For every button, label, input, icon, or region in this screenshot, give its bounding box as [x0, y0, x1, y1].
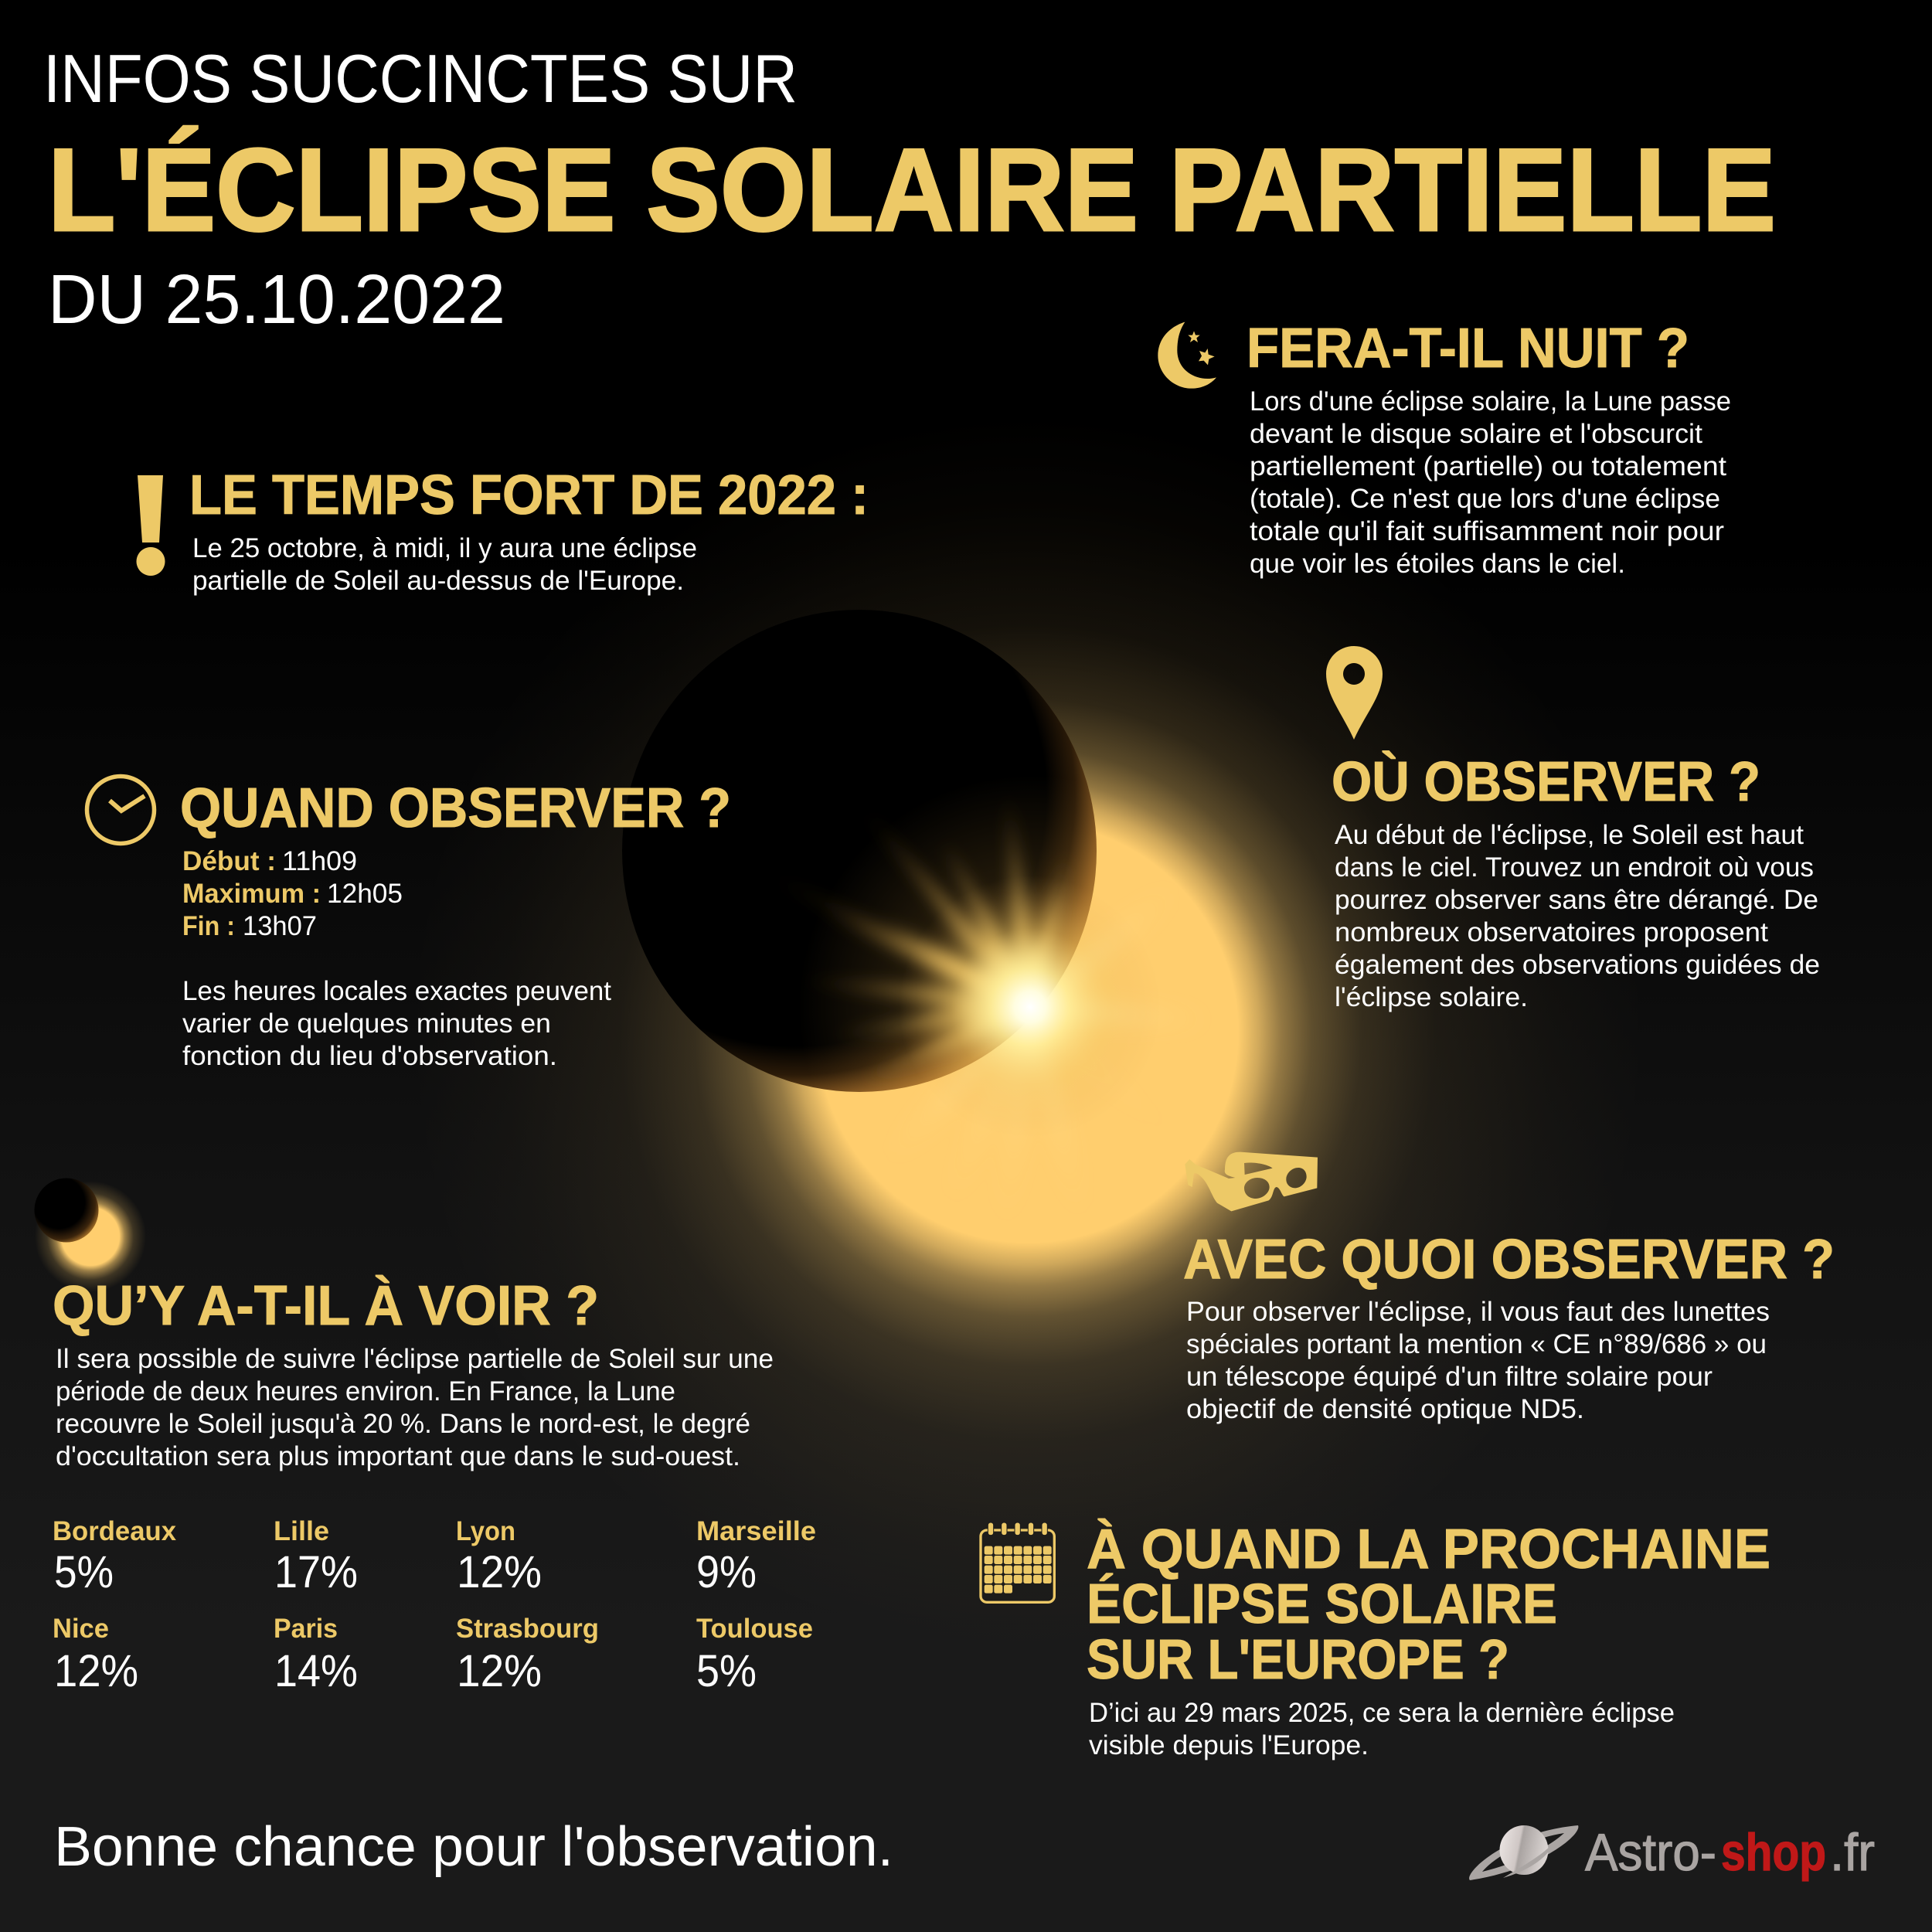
city percentages table: Lyon	[456, 1516, 515, 1546]
body text: Le 25 octobre, à midi, il y aura une éclipse	[192, 533, 697, 563]
body text: totale qu'il fait suffisamment noir pour	[1250, 516, 1724, 546]
panel: avec quoi observer	[1183, 1152, 1835, 1424]
body text	[1089, 1698, 1675, 1760]
city percentages table: 12%	[457, 1646, 542, 1696]
main title: L'ÉCLIPSE SOLAIRE PARTIELLE	[48, 124, 1776, 256]
icon: crescent moon and stars	[1158, 322, 1216, 389]
wordmark: shop	[1721, 1823, 1826, 1882]
city percentages table: Bordeaux	[53, 1516, 177, 1546]
sun rays across solar disc	[889, 889, 1206, 1229]
bright burst	[899, 876, 1162, 1138]
city percentages table: Toulouse	[696, 1614, 813, 1644]
body text: que voir les étoiles dans le ciel.	[1250, 549, 1625, 579]
heading: FERA-T-IL NUIT ?	[1247, 318, 1689, 379]
body text: varier de quelques minutes en	[182, 1009, 551, 1039]
times: Maximum :	[182, 879, 321, 909]
body text: l'éclipse solaire.	[1335, 982, 1528, 1012]
heading: QU’Y A-T-IL À VOIR ?	[53, 1275, 599, 1337]
body text	[1250, 386, 1731, 579]
body text: d'occultation sera plus important que dans le sud-ouest.	[56, 1441, 740, 1471]
city percentages table: 5%	[54, 1547, 114, 1597]
body text: Les heures locales exactes peuvent	[182, 976, 611, 1006]
icon: exclamation mark	[137, 475, 165, 576]
city percentages table: Nice	[53, 1614, 109, 1644]
times: 12h05	[327, 879, 403, 909]
panel: le temps fort	[137, 464, 869, 596]
city percentages table: Strasbourg	[456, 1614, 599, 1644]
body text: Il sera possible de suivre l'éclipse partielle de Soleil sur une	[56, 1344, 774, 1374]
heading: SUR L'EUROPE ?	[1087, 1629, 1509, 1691]
body text: dans le ciel. Trouvez un endroit où vous	[1335, 852, 1814, 883]
times: Fin :	[182, 911, 235, 941]
city percentages table: 5%	[696, 1646, 757, 1696]
body text: également des observations guidées de	[1335, 950, 1820, 980]
panel: prochaine éclipse	[981, 1519, 1770, 1760]
logo: Astro-shop.fr	[1469, 1823, 1875, 1882]
body text: pourrez observer sans être dérangé. De	[1335, 885, 1818, 915]
times	[182, 846, 403, 941]
icon: ringed planet	[1469, 1825, 1578, 1880]
body text: partiellement (partielle) ou totalement	[1250, 451, 1726, 481]
body text: spéciales portant la mention « CE n°89/686 » ou	[1186, 1329, 1767, 1359]
city percentages table: 12%	[457, 1547, 542, 1597]
city percentages table: 14%	[274, 1646, 358, 1696]
panel: quand observer	[87, 776, 731, 1071]
wordmark: .fr	[1830, 1823, 1875, 1882]
body text: visible depuis l'Europe.	[1089, 1730, 1369, 1760]
body text: fonction du lieu d'observation.	[182, 1041, 557, 1071]
body text: Au début de l'éclipse, le Soleil est haut	[1335, 820, 1804, 850]
body text: nombreux observatoires proposent	[1335, 917, 1768, 947]
body text: un télescope équipé d'un filtre solaire pour	[1186, 1362, 1713, 1392]
illustration: solar eclipse	[530, 531, 1525, 1526]
title line 1: INFOS SUCCINCTES SUR	[43, 40, 798, 117]
times: Début :	[182, 846, 276, 876]
body text: D’ici au 29 mars 2025, ce sera la dernière éclipse	[1089, 1698, 1675, 1728]
body text: recouvre le Soleil jusqu'à 20 %. Dans le nord-est, le degré	[56, 1409, 750, 1439]
body text	[182, 976, 611, 1071]
panel: fera-t-il nuit	[1158, 318, 1731, 579]
body text: objectif de densité optique ND5.	[1186, 1394, 1584, 1424]
heading: LE TEMPS FORT DE 2022 :	[189, 464, 869, 526]
body text: période de deux heures environ. En France, la Lune	[56, 1376, 675, 1406]
body text	[1186, 1297, 1770, 1424]
city percentages table: Lille	[274, 1516, 329, 1546]
body text: Pour observer l'éclipse, il vous faut des lunettes	[1186, 1297, 1770, 1327]
city percentages table	[53, 1516, 816, 1696]
sun with glow	[410, 414, 1646, 1651]
city percentages table: 12%	[54, 1646, 138, 1696]
icon: calendar	[981, 1522, 1054, 1602]
moon disc	[622, 610, 1097, 1092]
body text: devant le disque solaire et l'obscurcit	[1250, 419, 1702, 449]
heading: ÉCLIPSE SOLAIRE	[1087, 1573, 1557, 1635]
heading: QUAND OBSERVER ?	[180, 777, 731, 839]
heading: OÙ OBSERVER ?	[1332, 750, 1760, 813]
heading: AVEC QUOI OBSERVER ?	[1183, 1229, 1835, 1291]
panel: qu'y a-t-il à voir	[34, 1178, 816, 1696]
body text: Lors d'une éclipse solaire, la Lune passe	[1250, 386, 1731, 417]
times: 13h07	[243, 911, 317, 941]
icon: map pin	[1326, 646, 1383, 740]
wordmark	[1585, 1823, 1875, 1882]
body text	[56, 1344, 774, 1471]
heading	[1087, 1519, 1770, 1691]
title block	[43, 40, 1776, 338]
body text	[1335, 820, 1820, 1012]
icon: small eclipse	[34, 1178, 146, 1292]
icon: eclipse glasses	[1185, 1152, 1318, 1211]
body text	[192, 533, 697, 596]
icon: clock	[87, 776, 155, 844]
times: 11h09	[282, 846, 357, 876]
city percentages table: 9%	[696, 1547, 757, 1597]
closing message: Bonne chance pour l'observation.	[54, 1816, 893, 1878]
body text: partielle de Soleil au-dessus de l'Europe.	[192, 566, 684, 596]
heading: À QUAND LA PROCHAINE	[1087, 1519, 1770, 1580]
panel: où observer	[1326, 646, 1820, 1012]
body text: (totale). Ce n'est que lors d'une éclipse	[1250, 484, 1720, 514]
city percentages table: Marseille	[696, 1516, 816, 1546]
date line: DU 25.10.2022	[48, 261, 505, 338]
city percentages table: Paris	[274, 1614, 338, 1644]
rays over the moon	[765, 796, 1066, 1078]
city percentages table: 17%	[274, 1547, 358, 1597]
warm light on the moon near the burst	[824, 801, 1089, 1080]
wordmark: Astro-	[1585, 1823, 1716, 1882]
